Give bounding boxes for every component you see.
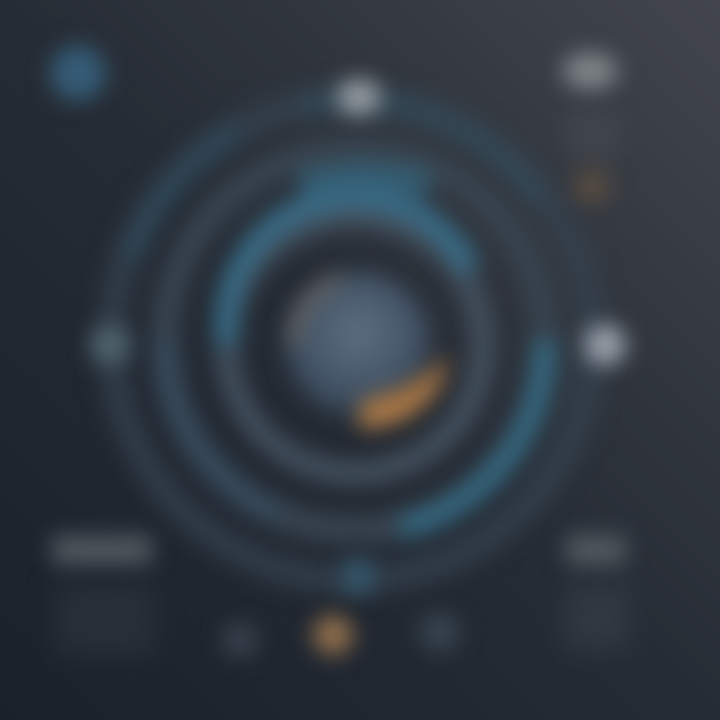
node: bottom teal	[340, 558, 376, 594]
heading: lower left	[52, 535, 152, 565]
icon: top right	[562, 52, 618, 90]
text block: lower left	[55, 585, 155, 655]
central globe	[286, 273, 448, 428]
globe rim highlight	[295, 280, 340, 345]
text block: top right	[565, 110, 620, 160]
node: right	[584, 324, 626, 366]
orange crescent	[358, 356, 448, 428]
icon: right brown	[574, 168, 610, 204]
node: bottom left	[222, 622, 258, 658]
node: bottom orange	[313, 615, 353, 655]
node: left	[90, 325, 130, 365]
orbital rings	[112, 100, 592, 580]
heading: lower right	[566, 534, 626, 566]
node: bottom right	[420, 612, 460, 652]
node: top	[337, 79, 381, 115]
text block: lower right	[565, 585, 630, 650]
icon: top left	[50, 45, 106, 101]
